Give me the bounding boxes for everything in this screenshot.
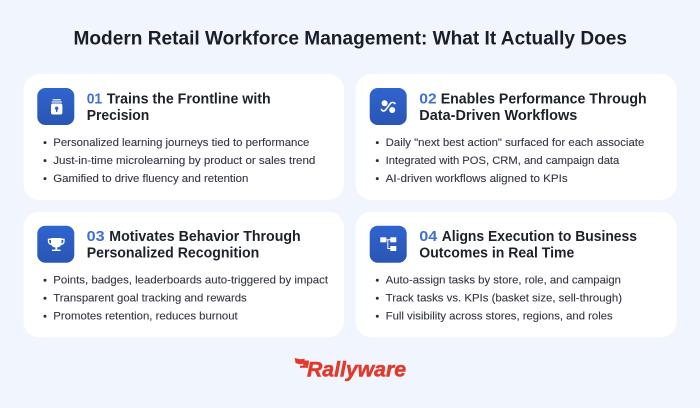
heading: Precision (87, 108, 149, 124)
bullet list (376, 137, 644, 185)
icon: lock bottle (37, 88, 74, 125)
heading: 02 (419, 91, 437, 107)
heading (87, 229, 301, 262)
bullet list: Transparent goal tracking and rewards (53, 293, 247, 305)
bullet list: Points, badges, leaderboards auto-triggered by impact (53, 275, 329, 287)
logo: Rallyware: Rallyware (307, 358, 406, 382)
heading: 01 (87, 91, 102, 107)
heading (419, 91, 647, 124)
panel: aligns execution (356, 212, 677, 337)
heading: Personalized Recognition (87, 246, 259, 262)
icon: workflow path (370, 88, 407, 125)
bullet list: Gamified to drive fluency and retention (53, 173, 248, 185)
heading: Enables Performance Through (441, 91, 647, 107)
panel: trains the frontline (24, 74, 344, 200)
heading: Outcomes in Real Time (419, 246, 574, 262)
bullet list: Personalized learning journeys tied to performance (53, 137, 309, 149)
bullet list: Just-in-time microlearning by product or sales trend (53, 155, 315, 167)
bullet list: AI-driven workflows aligned to KPIs (386, 173, 568, 185)
icon: trophy (37, 226, 74, 263)
bullet list: Integrated with POS, CRM, and campaign data (386, 155, 620, 167)
bullet list: Auto-assign tasks by store, role, and campaign (386, 275, 621, 287)
heading (419, 229, 637, 262)
bullet list: Daily "next best action" surfaced for each associate (386, 137, 644, 149)
bullet list (44, 137, 315, 185)
title: Modern Retail Workforce Management: What It Actually Does (74, 29, 627, 50)
heading (87, 91, 271, 124)
bullet list: Track tasks vs. KPIs (basket size, sell-through) (386, 293, 622, 305)
heading: Trains the Frontline with (107, 91, 271, 107)
panel: enables performance (356, 74, 677, 200)
bullet list: Full visibility across stores, regions, and roles (386, 311, 613, 323)
icon: hierarchy (370, 226, 407, 263)
bullet list (44, 275, 329, 323)
heading: 03 (87, 229, 105, 245)
heading: Motivates Behavior Through (109, 229, 301, 245)
panel: motivates behavior (24, 212, 344, 337)
heading: 04 (419, 229, 437, 245)
bullet list (376, 275, 622, 323)
heading: Aligns Execution to Business (442, 229, 637, 245)
bullet list: Promotes retention, reduces burnout (53, 311, 239, 323)
heading: Data-Driven Workflows (419, 108, 577, 124)
